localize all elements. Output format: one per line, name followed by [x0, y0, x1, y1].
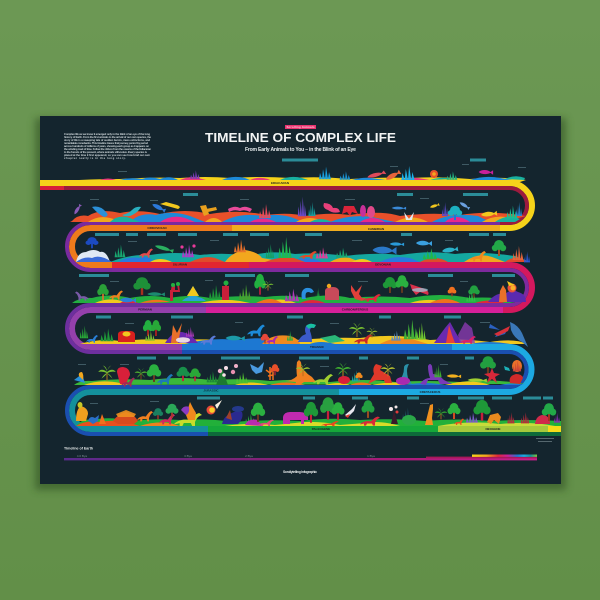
species name pills [79, 158, 553, 400]
source note [536, 438, 554, 442]
complex life section of bar [426, 457, 537, 458]
intro text block: to the forests of the present, where animals still evolve. Every species is [64, 150, 148, 154]
era labels on the ribbon: PALEOGENE [312, 427, 330, 431]
intro text block: chapter really is in the long story. [64, 156, 126, 160]
scene row 6: Jurassic and Cretaceous life [74, 356, 525, 387]
ribbon row 2 and left curve [67, 223, 500, 270]
subtitle: From Early Animals to You – in the Blink of an Eye [245, 147, 356, 153]
panel: serpentine timeline ribbon [40, 183, 561, 434]
earth history bar [64, 458, 537, 460]
era labels on the ribbon: NEOGENE [485, 427, 501, 431]
intro text block: across hundreds of millions of years, showing each group as it appears on [64, 144, 149, 148]
era labels on the ribbon [138, 181, 501, 431]
era labels on the ribbon: ORDOVICIAN [147, 226, 167, 230]
bar tick labels [77, 454, 375, 458]
ribbon row 3 and right curve [112, 265, 532, 310]
era labels on the ribbon: TRIASSIC [310, 345, 325, 349]
intro text block: the winding road of time. Follow the ribbon from the oceans of the Ediacaran [64, 147, 151, 151]
intro text block: remarkable comebacks. This timeline traces that journey, period by period [64, 141, 148, 145]
ribbon row 7 [208, 429, 561, 434]
bar tick labels: 2 Bya [245, 454, 253, 458]
era labels on the ribbon: JURASSIC [203, 388, 219, 392]
era labels on the ribbon: SILURIAN [173, 262, 187, 266]
ribbon row 5 and right curve [90, 347, 532, 392]
intro text block: placed at the time it first appeared, so you can see how brief our own [64, 153, 150, 157]
scene row 2: Cambrian and Ordovician seas [70, 197, 526, 222]
ribbon row 4 and left curve [67, 305, 503, 352]
bar tick labels: 3 Bya [184, 454, 192, 458]
scene row 1: Ediacaran seabed [62, 166, 526, 182]
intro text block: Complex life as we know it emerged only in the blink of an eye of the long [64, 132, 150, 136]
intro text block [64, 132, 152, 160]
footer credit: Scrollytelling Infographic [283, 470, 317, 474]
era labels on the ribbon: EDIACARAN [271, 181, 289, 185]
intro text block: history of Earth. From the first animals to the arrival of our own species, the [64, 135, 152, 139]
era labels on the ribbon: PERMIAN [138, 308, 152, 312]
scene row 5: Triassic and early Jurassic [80, 320, 528, 347]
era labels on the ribbon: CRETACEOUS [420, 390, 440, 394]
era labels on the ribbon: CAMBRIAN [368, 227, 384, 231]
intro text block: story of life is a sweeping tale of sudden bursts, mass extinctions, and [64, 138, 150, 142]
bar tick labels: 1 Bya [367, 454, 375, 458]
scene row 3: Silurian and Devonian shores [76, 237, 530, 262]
rainbow strip of periods [472, 454, 537, 457]
header badge: Scrolling Animals [286, 125, 315, 129]
scene row 7: extinction and the age of mammals [76, 397, 561, 426]
poster shadow [35, 118, 566, 490]
ribbon row 6 and left curve [67, 387, 339, 434]
ribbon row 1 and right curve [40, 183, 532, 228]
timeline of Earth: Timeline of Earth [64, 446, 93, 450]
era labels on the ribbon: DEVONIAN [375, 262, 391, 266]
scene row 4: Carboniferous and Permian swamps [72, 274, 526, 303]
faint name annotations [78, 164, 526, 404]
bar tick labels: 4.6 Bya [77, 454, 87, 458]
era labels on the ribbon: CARBONIFEROUS [342, 308, 368, 312]
title: TIMELINE OF COMPLEX LIFE [205, 131, 396, 145]
poster [40, 116, 561, 484]
timeline of Earth [64, 446, 537, 460]
